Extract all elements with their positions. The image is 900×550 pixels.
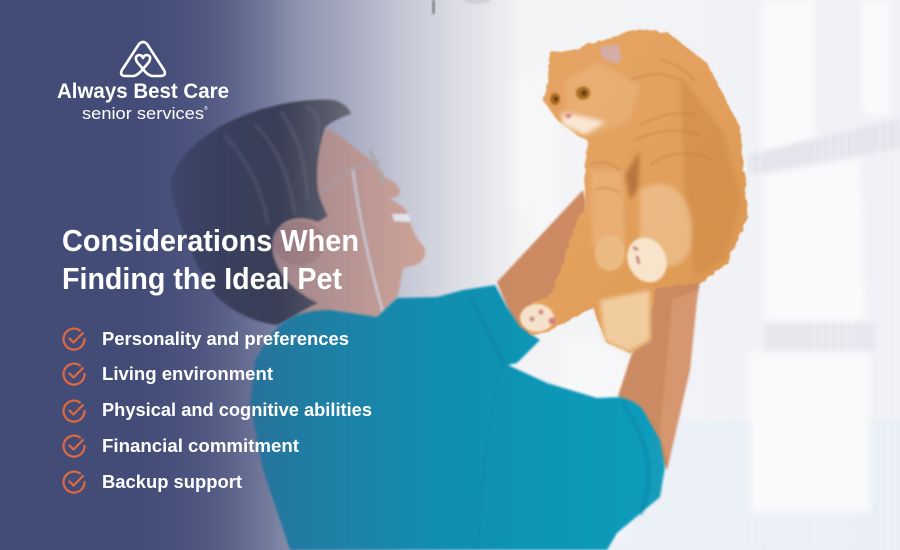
illustration: teal shirt <box>250 285 665 550</box>
logo: Always Best Care: Always Best Care <box>57 80 229 103</box>
logo: Always Best Care <box>57 42 229 123</box>
illustration: orange cat <box>520 30 748 353</box>
cat eyes and nose <box>550 86 590 119</box>
logo: Always Best Care: ® <box>204 105 208 112</box>
cat paws <box>520 231 674 332</box>
item: living environment: Living environment <box>102 363 273 384</box>
item: abilities: Physical and cognitive abilities <box>102 399 372 420</box>
illustration: woman's raised arms <box>497 190 702 470</box>
checklist <box>64 328 372 493</box>
illustration: woman's head and neck <box>170 100 425 325</box>
logo: Always Best Care: senior services <box>82 105 204 123</box>
title <box>62 223 359 296</box>
item: backup support: Backup support <box>102 471 242 492</box>
cat fur stripes <box>590 60 712 193</box>
icon: triangle with heart <box>121 42 165 76</box>
item: financial commitment: Financial commitment <box>102 435 299 456</box>
title: Finding the Ideal Pet <box>62 261 342 296</box>
item: personality: Personality and preferences <box>102 328 349 349</box>
title: Considerations When <box>62 223 359 258</box>
cat ear <box>600 44 622 64</box>
